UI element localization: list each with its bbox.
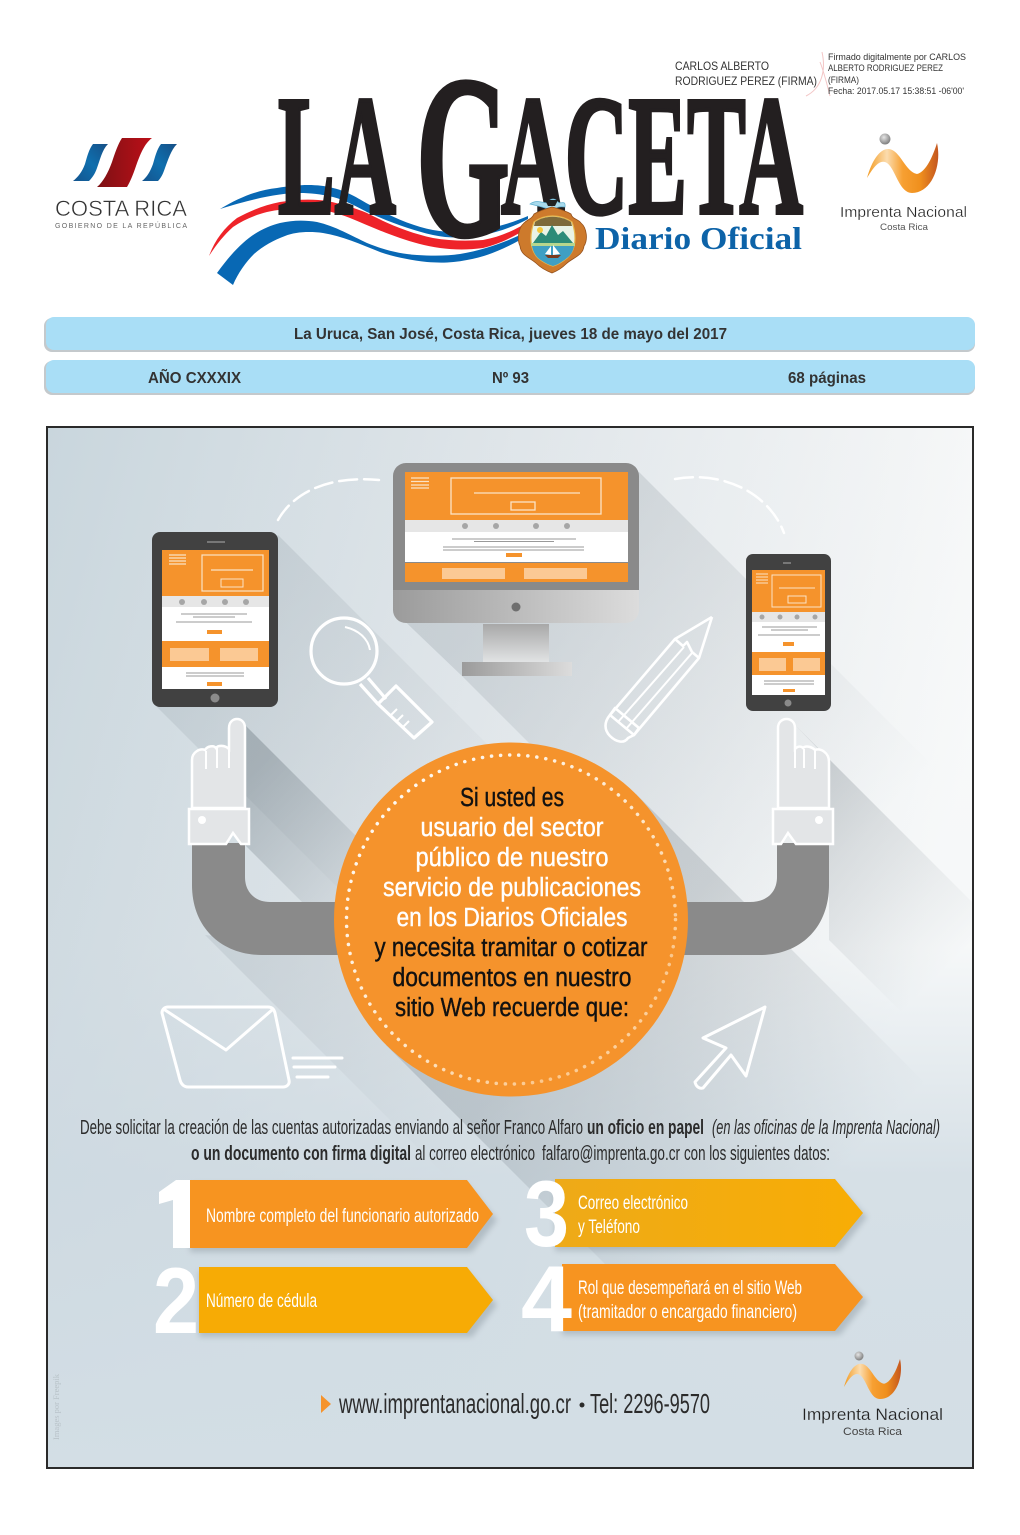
instructions paragraph: al correo electrónico [415,1143,535,1165]
step 3 [524,1161,867,1266]
illustration: arms and hands [189,719,833,955]
icon: coat of arms [518,199,586,273]
callout circle: usuario del sector [420,814,604,842]
panel: infographic [47,427,1020,1468]
step 2: 2 [153,1248,199,1353]
logo: Costa Rica government: COSTA RICA [55,196,187,221]
callout circle: Si usted es [460,784,564,812]
icon: cursor arrow [695,1007,765,1088]
logo: Imprenta Nacional footer [802,1352,943,1438]
digital signature block: ALBERTO RODRIGUEZ PEREZ [828,63,943,74]
masthead title: La Gaceta: G [416,29,510,286]
logo: Imprenta Nacional: Imprenta Nacional [840,204,967,221]
icon: envelope [162,1007,342,1087]
icon: tablet [152,532,278,707]
edition bar: 68 páginas [788,370,866,387]
step 3: Correo electrónico [578,1193,688,1214]
step 2: Número de cédula [206,1291,317,1312]
step 4: 4 [521,1246,572,1351]
digital signature block: Firmado digitalmente por CARLOS [828,52,966,63]
instructions paragraph: con los siguientes datos: [684,1143,830,1165]
masthead title: La Gaceta: LA [278,61,396,250]
instructions paragraph [80,1117,940,1165]
instructions paragraph: falfaro@imprenta.go.cr [542,1143,680,1165]
left hand [189,719,249,844]
subtitle: Diario Oficial: Diario Oficial [595,220,802,256]
logo: Costa Rica government [55,138,187,230]
edition bar [44,360,975,395]
logo: Imprenta Nacional: Costa Rica [880,222,929,233]
digital signature block: RODRIGUEZ PEREZ (FIRMA) [675,74,817,88]
flag ribbon waves [209,185,528,285]
edition bar: AÑO CXXXIX [148,367,241,387]
left arm sleeve [192,843,400,955]
step 3: y Teléfono [578,1217,640,1238]
date bar: La Uruca, San José, Costa Rica, jueves 18 de mayo del 2017 [294,326,727,343]
icon: pencil [606,617,712,742]
image credit: Images por Freepik [52,1374,61,1440]
contact line: www.imprentanacional.go.cr [338,1388,571,1419]
digital signature block: CARLOS ALBERTO [675,59,769,73]
step 1 [159,1180,497,1252]
step 4 [521,1246,867,1351]
instructions paragraph: un oficio en papel [587,1117,704,1139]
callout circle: público de nuestro [416,844,608,872]
callout circle: servicio de publicaciones [383,874,641,902]
callout circle: y necesita tramitar o cotizar [374,934,648,962]
instructions paragraph: Debe solicitar la creación de las cuentas autorizadas enviando al señor Franco Alfaro [80,1117,583,1139]
panel border [47,427,973,1468]
callout circle [334,742,688,1096]
logo: Imprenta Nacional footer: Imprenta Nacional [802,1406,943,1424]
digital signature block: Fecha: 2017.05.17 15:38:51 -06'00' [828,86,964,97]
step 3: 3 [524,1161,569,1266]
digital signature block [675,52,966,97]
step 4: (tramitador o encargado financiero) [578,1302,797,1323]
step 2 [153,1248,497,1353]
right arm sleeve [620,843,829,955]
callout circle: sitio Web recuerde que: [395,994,629,1022]
right hand [773,719,833,844]
instructions paragraph: o un documento con firma digital [191,1143,411,1165]
date bar [44,317,975,352]
digital signature block: (FIRMA) [828,75,859,86]
step 1: Nombre completo del funcionario autorizado [206,1206,479,1227]
contact line: Tel: 2296-9570 [590,1388,710,1419]
logo: Costa Rica government: GOBIERNO DE LA REPÚBLICA [55,221,187,230]
callout circle: documentos en nuestro [392,964,632,992]
logo: Imprenta Nacional footer: Costa Rica [843,1426,903,1438]
callout circle: en los Diarios Oficiales [396,904,628,932]
step 4: Rol que desempeñará en el sitio Web [578,1278,802,1299]
icon: magnifying glass [311,618,432,738]
connector dashes [278,477,784,533]
icon: smartphone [746,554,831,711]
icon: desktop monitor [393,463,639,676]
edition bar: Nº 93 [492,370,529,387]
logo: Imprenta Nacional [840,134,967,233]
masthead title: La Gaceta [278,29,803,286]
